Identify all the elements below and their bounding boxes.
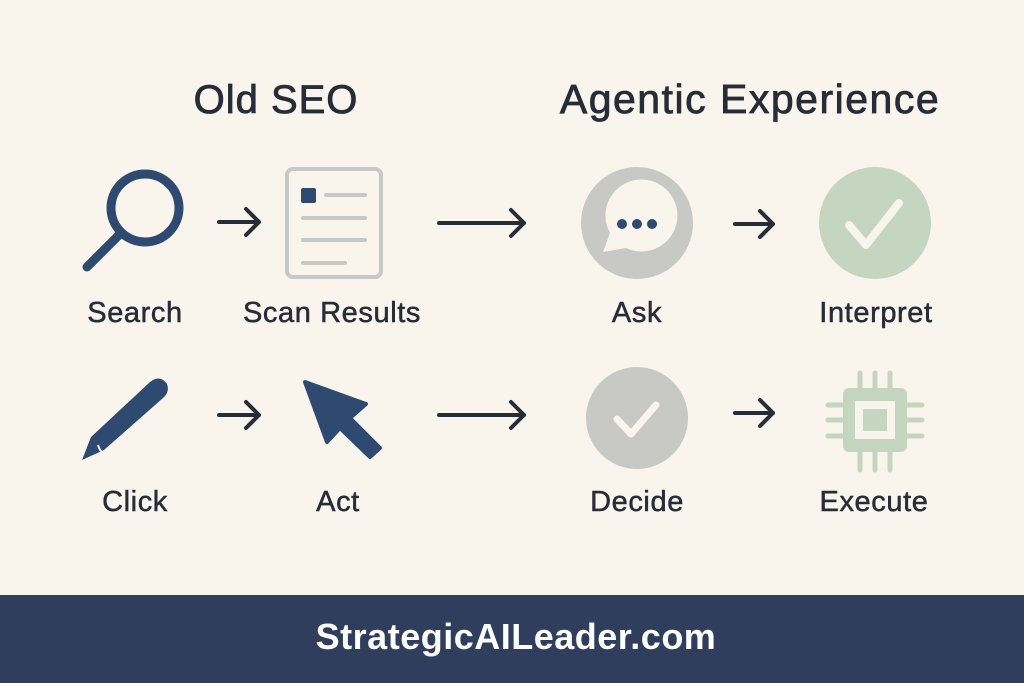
arrow: decide to execute bbox=[735, 400, 773, 426]
labels row 2: Execute bbox=[820, 486, 928, 518]
icon: interpret check bbox=[819, 167, 931, 279]
labels row 2: Act bbox=[316, 486, 360, 518]
labels row 2: Decide bbox=[590, 486, 684, 518]
icon: search magnifier bbox=[87, 174, 179, 267]
footer banner bbox=[0, 595, 1024, 683]
arrow: ask to interpret bbox=[735, 211, 773, 237]
labels row 2 bbox=[102, 486, 928, 518]
labels row 1: Scan Results bbox=[243, 297, 421, 329]
arrow: search to scan bbox=[219, 209, 259, 235]
labels row 1: Ask bbox=[612, 297, 662, 329]
arrow: long top bbox=[439, 210, 524, 236]
icon: document bbox=[287, 169, 381, 277]
labels row 1 bbox=[87, 297, 933, 329]
footer banner: StrategicAILeader.com bbox=[316, 616, 716, 657]
arrow: long bottom bbox=[439, 402, 524, 428]
arrow: click to act bbox=[219, 402, 259, 428]
labels row 1: Interpret bbox=[819, 297, 933, 329]
icon: cursor bbox=[305, 382, 380, 457]
title: Old SEO: Old SEO bbox=[194, 78, 358, 122]
icon: chip bbox=[828, 373, 922, 470]
icon: ask chat bubble bbox=[581, 167, 693, 279]
title: Agentic Experience: Agentic Experience bbox=[560, 76, 940, 122]
icon: pencil bbox=[82, 378, 168, 460]
labels row 1: Search bbox=[87, 297, 183, 329]
icon: decide check bbox=[586, 367, 688, 469]
labels row 2: Click bbox=[102, 486, 168, 518]
